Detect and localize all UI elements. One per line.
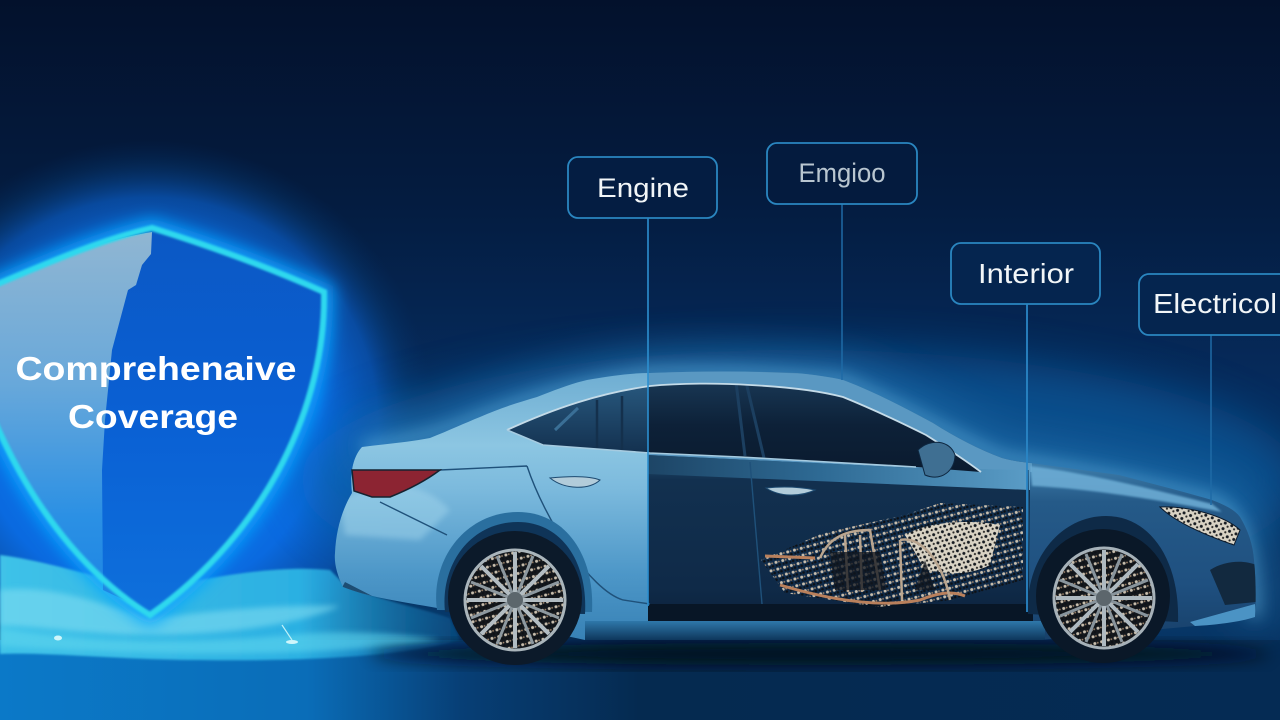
car body xyxy=(320,360,1270,645)
shield title: Coverage xyxy=(68,398,238,435)
tail light xyxy=(352,470,440,497)
side mirror xyxy=(918,442,955,477)
label: Engine: Engine xyxy=(597,173,689,203)
shield title xyxy=(16,350,296,435)
label: Interior: Interior xyxy=(978,258,1074,289)
shield outer glow xyxy=(0,228,324,615)
ground shadow xyxy=(370,643,1270,665)
label: Emgioo xyxy=(767,143,917,204)
car halo xyxy=(362,372,1255,617)
label: Electricol: Electricol xyxy=(1153,288,1277,319)
door handles xyxy=(550,477,815,495)
body creases and door seams xyxy=(380,462,1030,610)
label: Emgioo: Emgioo xyxy=(798,158,886,188)
door belt strip xyxy=(648,455,1030,490)
rear wheel xyxy=(436,512,592,665)
shield fill xyxy=(0,228,324,615)
label: Engine xyxy=(568,157,717,218)
shield neon rim xyxy=(0,228,324,615)
car xyxy=(320,360,1270,665)
label: Interior xyxy=(951,243,1100,304)
label: Electricol xyxy=(1139,274,1280,335)
floor xyxy=(0,640,1280,720)
engine cutaway xyxy=(761,503,1023,607)
shield light half xyxy=(0,232,152,612)
connector lines xyxy=(648,204,1211,612)
water splash xyxy=(0,555,460,660)
shield title: Comprehenaive xyxy=(16,350,296,387)
shield xyxy=(0,228,324,615)
window trim xyxy=(507,384,981,472)
front wheel xyxy=(1028,516,1178,663)
car windows xyxy=(509,384,980,472)
roof and A-pillar band xyxy=(648,368,1032,472)
headlight xyxy=(1160,507,1240,545)
